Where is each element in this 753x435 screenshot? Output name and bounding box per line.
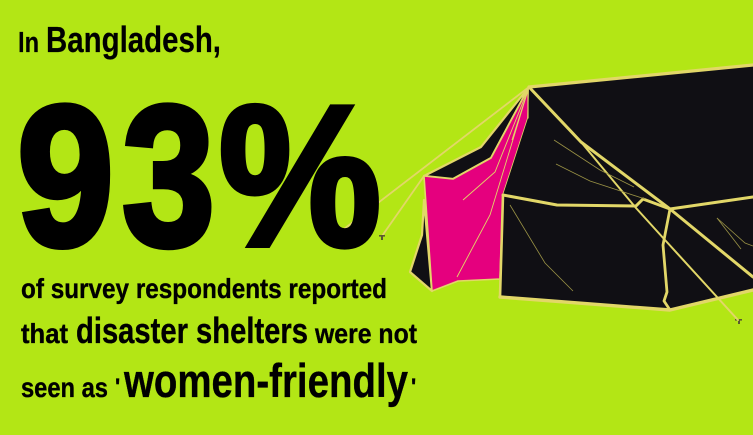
heading: In Bangladesh: In — [18, 27, 39, 59]
tent: rope pegs — [379, 235, 742, 324]
big statistic: 93%: 3 — [122, 65, 215, 288]
text block: survey finding: women-friendly — [123, 354, 408, 407]
tent: guy ropes on the left — [344, 87, 529, 236]
text block: survey finding: ' — [411, 374, 416, 399]
tent: pink panel seams — [457, 87, 529, 277]
text block: survey finding: disaster shelters — [76, 310, 308, 351]
heading: In Bangladesh: Bangladesh, — [46, 19, 221, 60]
text block: survey finding: that — [21, 318, 68, 349]
big statistic: 93%: % — [219, 65, 381, 288]
text block: survey finding — [21, 273, 417, 407]
tent: rear dark panel — [424, 87, 529, 179]
icon: collapsed tent — [344, 65, 753, 324]
tent: left dark flap — [410, 200, 432, 291]
text block: survey finding: were not — [314, 318, 417, 349]
text block: survey finding: seen as — [21, 372, 108, 403]
tent: main dark body — [500, 65, 753, 310]
tent: pink panel — [424, 87, 529, 291]
big statistic: 93% — [17, 65, 381, 288]
tent: fine crease lines — [510, 140, 753, 291]
text block: survey finding: ' — [115, 374, 120, 399]
big statistic: 93%: 9 — [17, 65, 114, 288]
text block: survey finding: of survey respondents reported — [21, 273, 387, 304]
tent: main outline and folds — [500, 65, 753, 320]
